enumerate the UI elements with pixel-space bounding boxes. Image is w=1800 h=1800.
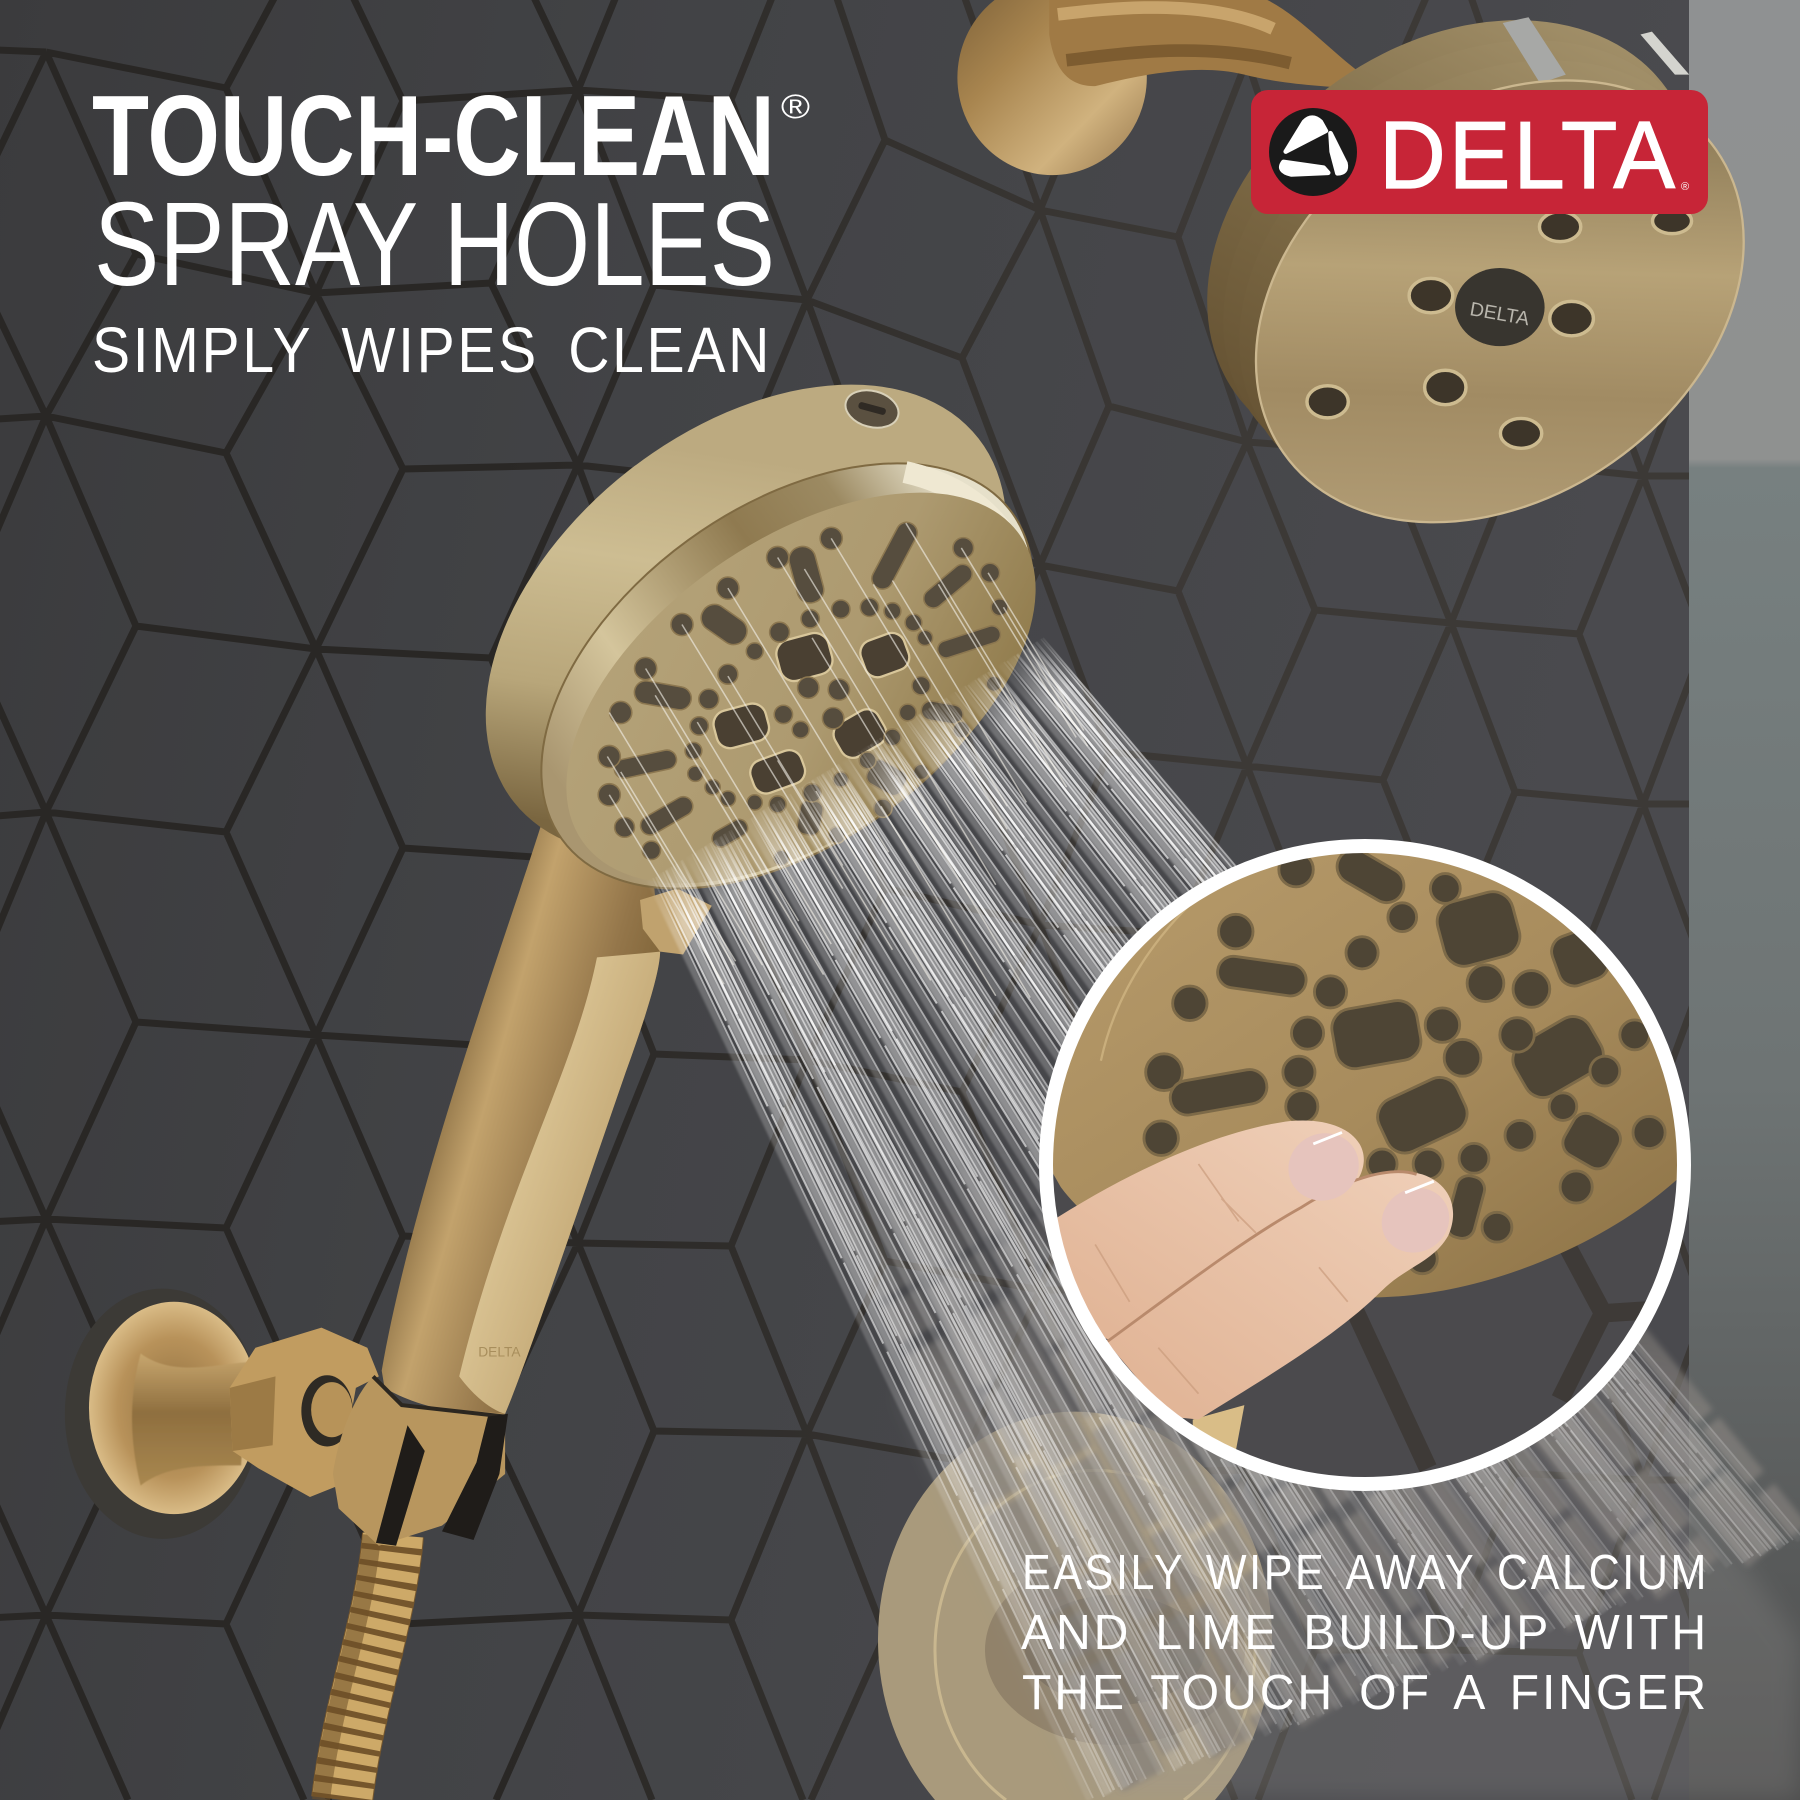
Delta triangle emblem <box>1269 108 1357 196</box>
rain head center badge: DELTA <box>1468 298 1531 330</box>
caption <box>1021 1545 1709 1720</box>
fingernails <box>1288 1134 1449 1252</box>
Delta logo badge <box>1251 90 1708 214</box>
water spray <box>607 523 1800 1800</box>
title: SPRAY HOLES <box>94 178 775 311</box>
Delta logo badge: DELTA <box>1379 102 1678 209</box>
hand shower head <box>397 289 1111 975</box>
handle cradle <box>333 1376 508 1546</box>
mode selector button <box>841 385 903 433</box>
title: TOUCH-CLEAN <box>92 73 775 200</box>
hand shower handle: DELTA <box>478 1344 521 1359</box>
caption: EASILY WIPE AWAY CALCIUM <box>1022 1545 1709 1600</box>
face spray nozzles <box>598 519 1008 866</box>
shower arm and flange <box>957 0 1371 175</box>
flexible hose <box>321 1535 393 1800</box>
circular detail inset <box>1038 843 1704 1484</box>
title: ® <box>781 88 810 126</box>
hand shower handle <box>333 821 712 1546</box>
jets crossing the spray face <box>607 523 1088 998</box>
fingers <box>1038 1120 1461 1419</box>
inset nozzles <box>1144 843 1665 1274</box>
caption: AND LIME BUILD-UP WITH <box>1021 1605 1709 1660</box>
caption: THE TOUCH OF A FINGER <box>1022 1665 1709 1720</box>
diverter trim plate <box>878 1412 1272 1800</box>
inset gold piece below hand <box>1193 1405 1244 1451</box>
inset tile grout <box>1349 1246 1646 1472</box>
rain head nozzles <box>1307 208 1692 448</box>
wall mount bracket <box>65 1289 379 1539</box>
title <box>92 73 810 311</box>
rain shower head <box>1122 0 1800 614</box>
Delta logo badge: ® <box>1681 181 1689 193</box>
subtitle: SIMPLY WIPES CLEAN <box>92 314 772 386</box>
rain head center badge <box>1455 268 1545 346</box>
inset spray face disc <box>1038 843 1704 1297</box>
